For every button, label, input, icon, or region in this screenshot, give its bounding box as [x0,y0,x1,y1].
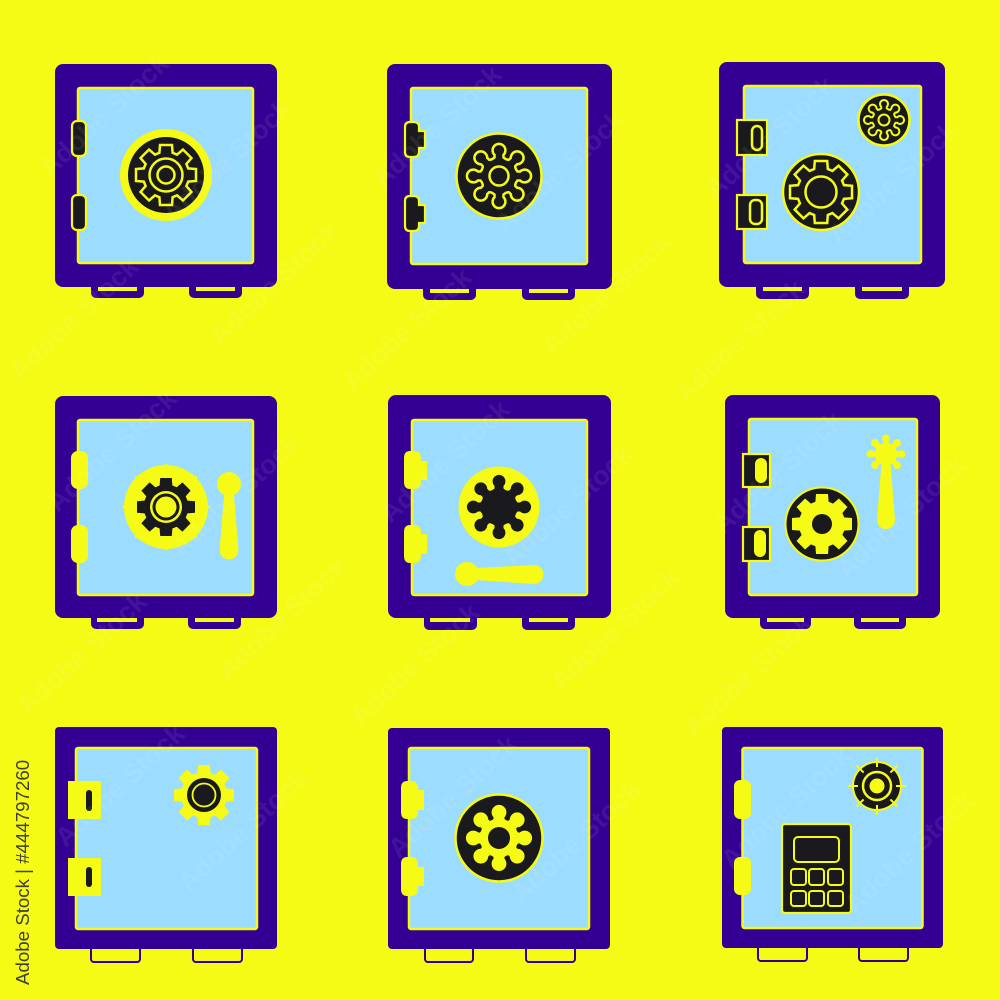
watermark: Adobe Stock [49,718,191,853]
feet [91,611,241,629]
body [725,395,940,618]
watermark: Adobe Stock [822,115,964,250]
dial [120,129,212,221]
hinges [401,781,424,896]
watermark: Adobe Stock [489,104,631,239]
watermark: Adobe Stock [699,70,841,205]
feet [423,282,575,300]
stock id caption: Adobe Stock | #444797260 [12,760,33,985]
safe 2: outlined virus-shaped dial [387,64,612,300]
watermark: Adobe Stock [344,597,486,732]
dial [786,488,858,560]
dial [122,464,210,550]
feet [425,940,575,962]
hinges [405,122,425,231]
feet [424,612,575,630]
door [742,748,922,928]
body [55,727,277,949]
feet [758,940,908,961]
feet [760,611,906,629]
safe 9: keypad and small dial [722,727,943,961]
watermark: Adobe Stock [715,740,857,875]
key handle [866,434,906,529]
handle [455,562,544,586]
body [722,727,943,948]
hinges [404,451,427,563]
body [388,395,611,618]
safe 7: small gear dial and plate hinges [55,727,277,962]
watermark: Adobe Stock [11,586,153,721]
watermark: Adobe Stock [374,394,516,529]
watermark: Adobe Stock [544,562,686,697]
door [412,420,587,595]
hinges [734,780,751,895]
watermark: Adobe Stock [838,785,980,920]
door [749,419,917,595]
watermark: Adobe Stock [211,551,353,686]
door [744,86,921,263]
watermark: Adobe Stock [164,428,306,563]
hinges [72,121,86,230]
watermark: Adobe Stock [336,262,478,397]
hinges [737,120,767,229]
watermark: Adobe Stock [366,59,508,194]
safe 4: solid gear dial and vertical handle [55,396,277,629]
watermark: Adobe Stock [505,774,647,909]
small dial [858,94,910,146]
dial [456,794,542,882]
dial [458,466,540,548]
watermark: Adobe Stock [382,729,524,864]
watermark: Adobe Stock [830,450,972,585]
large dial [783,154,859,230]
door [76,748,257,929]
feet [756,281,909,299]
safe 1: outlined gear dial [55,64,277,298]
hinges [71,451,88,563]
feet [91,280,242,298]
watermark: Adobe Stock [707,405,849,540]
keypad [782,824,851,913]
watermark: Adobe Stock [156,93,298,228]
hinges [743,454,770,561]
watermark: Adobe Stock [41,383,183,518]
door [411,88,587,264]
dial [456,134,542,218]
safe 8: yellow virus dial [388,728,610,962]
dial [848,757,906,815]
body [388,728,610,949]
door [409,748,589,929]
feet [91,940,242,962]
safe 3: two dials [719,62,945,299]
watermark: Adobe Stock [669,273,811,408]
handle [217,472,241,560]
body [719,62,945,287]
safe 5: solid virus dial and horizontal handle [388,395,611,630]
body [55,396,277,618]
safe 6: filled gear dial and key handle [725,395,940,629]
watermark: Adobe Stock [203,216,345,351]
watermark: Adobe Stock [536,227,678,362]
watermark: Adobe Stock [497,439,639,574]
watermark: Adobe Stock [33,48,175,183]
body [387,64,612,289]
door [78,88,253,263]
watermark: Adobe Stock [677,608,819,743]
watermark: Adobe Stock [172,763,314,898]
body [55,64,277,287]
hinges [68,781,101,896]
dial [174,765,234,825]
door [78,420,253,595]
watermark: Adobe Stock [3,251,145,386]
